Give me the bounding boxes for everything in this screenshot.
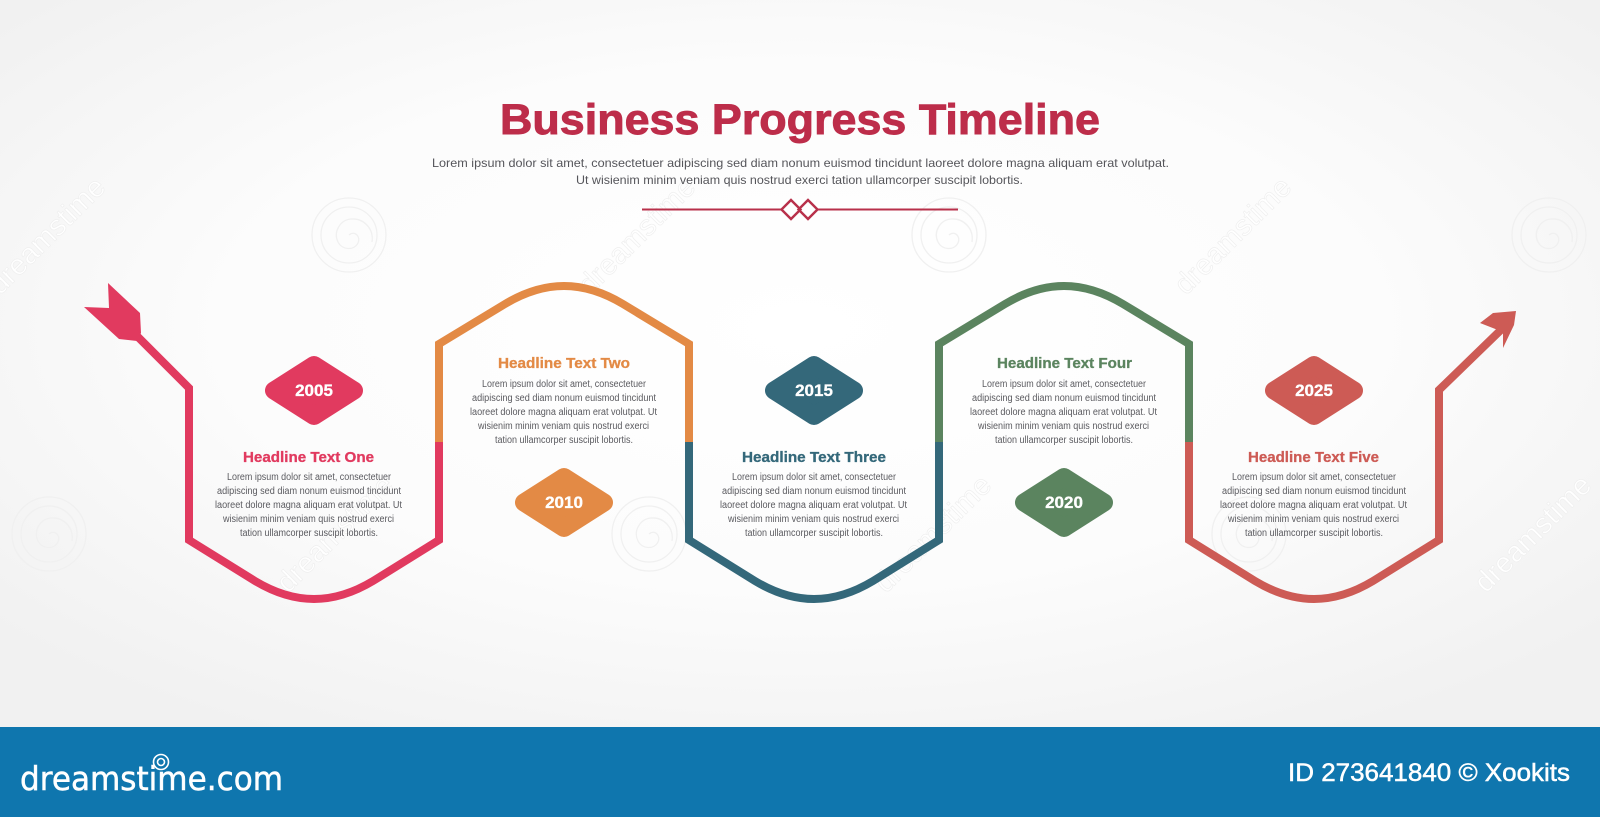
body four: wisienim minim veniam quis nostrud exerci: [977, 421, 1149, 432]
step 4: 2020: [939, 286, 1189, 528]
body two: adipiscing sed diam nonum euismod tincidunt: [472, 393, 656, 404]
body two: wisienim minim veniam quis nostrud exerci: [477, 421, 649, 432]
body three: [720, 472, 907, 539]
headline two: Headline Text Two: [498, 356, 630, 372]
body five: Lorem ipsum dolor sit amet, consectetuer: [1232, 472, 1397, 483]
body three: tation ullamcorper suscipit lobortis.: [745, 528, 883, 539]
arrow tail: [84, 283, 141, 341]
body two: tation ullamcorper suscipit lobortis.: [495, 435, 633, 446]
body three: Lorem ipsum dolor sit amet, consectetuer: [732, 472, 897, 483]
headline five: Headline Text Five: [1248, 450, 1379, 466]
body five: laoreet dolore magna aliquam erat volutpat. Ut: [1220, 500, 1407, 511]
path segment teal: [689, 442, 939, 599]
subtitle: Ut wisienim minim veniam quis nostrud exerci tation ullamcorper suscipit lobortis.: [576, 173, 1023, 187]
body three: adipiscing sed diam nonum euismod tincidunt: [722, 486, 906, 497]
year badge 2020: 2020: [1045, 493, 1083, 512]
watermark spirals: dreamstime: [1468, 469, 1598, 599]
logo wordmark: dreamstime.com: [20, 759, 283, 798]
body one: tation ullamcorper suscipit lobortis.: [240, 528, 378, 539]
body three: laoreet dolore magna aliquam erat volutpat. Ut: [720, 500, 907, 511]
body one: laoreet dolore magna aliquam erat volutpat. Ut: [215, 500, 402, 511]
year badge 2005: [274, 365, 354, 416]
year badge 2015: [774, 365, 854, 416]
body one: wisienim minim veniam quis nostrud exerci: [222, 514, 394, 525]
body one: [215, 472, 402, 539]
arrow head: [1480, 311, 1516, 348]
year badge 2015: 2015: [795, 381, 833, 400]
body five: [1220, 472, 1407, 539]
body five: tation ullamcorper suscipit lobortis.: [1245, 528, 1383, 539]
headline four: Headline Text Four: [997, 356, 1132, 372]
year badge 2025: [1274, 365, 1354, 416]
title: Business Progress Timeline: [500, 96, 1100, 144]
year badge 2025: 2025: [1295, 381, 1333, 400]
image id and credit: ID 273641840 © Xookits: [1288, 759, 1570, 787]
body five: adipiscing sed diam nonum euismod tincidunt: [1222, 486, 1406, 497]
body two: Lorem ipsum dolor sit amet, consectetuer: [482, 379, 647, 390]
body four: adipiscing sed diam nonum euismod tincidunt: [972, 393, 1156, 404]
step 5: 2025: [1189, 311, 1516, 599]
watermark spirals: dreamstime: [868, 469, 998, 599]
path segment pink: [134, 333, 439, 599]
headline one: Headline Text One: [243, 450, 374, 466]
body four: laoreet dolore magna aliquam erat volutpat. Ut: [970, 407, 1157, 418]
year badge 2005: 2005: [295, 381, 333, 400]
watermark spirals: [0, 171, 1598, 599]
icon: logo spiral: [154, 754, 168, 770]
title divider with twin diamonds: [642, 200, 958, 219]
headline three: Headline Text Three: [742, 450, 886, 466]
watermark spirals: dreamstime: [1168, 171, 1298, 301]
body two: [470, 379, 657, 446]
watermark spirals: dreamstime: [572, 171, 702, 301]
body three: wisienim minim veniam quis nostrud exerci: [727, 514, 899, 525]
step 1: 2005: [84, 283, 439, 599]
subtitle: [432, 156, 1169, 187]
body four: Lorem ipsum dolor sit amet, consectetuer: [982, 379, 1147, 390]
year badge 2020: [1024, 477, 1104, 528]
footer band: [0, 727, 1600, 817]
subtitle: Lorem ipsum dolor sit amet, consectetuer adipiscing sed diam nonum euismod tincidunt laoreet dolore magna aliquam erat volutpat.: [432, 156, 1169, 170]
body five: wisienim minim veniam quis nostrud exerci: [1227, 514, 1399, 525]
path segment red with arrow line: [1189, 325, 1506, 599]
year badge 2010: [524, 477, 604, 528]
body one: adipiscing sed diam nonum euismod tincidunt: [217, 486, 401, 497]
body two: laoreet dolore magna aliquam erat volutpat. Ut: [470, 407, 657, 418]
path segment green: [939, 286, 1189, 442]
body four: [970, 379, 1157, 446]
body one: Lorem ipsum dolor sit amet, consectetuer: [227, 472, 392, 483]
year badge 2010: 2010: [545, 493, 583, 512]
path segment orange: [439, 286, 689, 442]
step 3: 2015: [689, 365, 939, 599]
watermark spirals: dreamstime: [270, 469, 400, 599]
body four: tation ullamcorper suscipit lobortis.: [995, 435, 1133, 446]
step 2: 2010: [439, 286, 689, 528]
